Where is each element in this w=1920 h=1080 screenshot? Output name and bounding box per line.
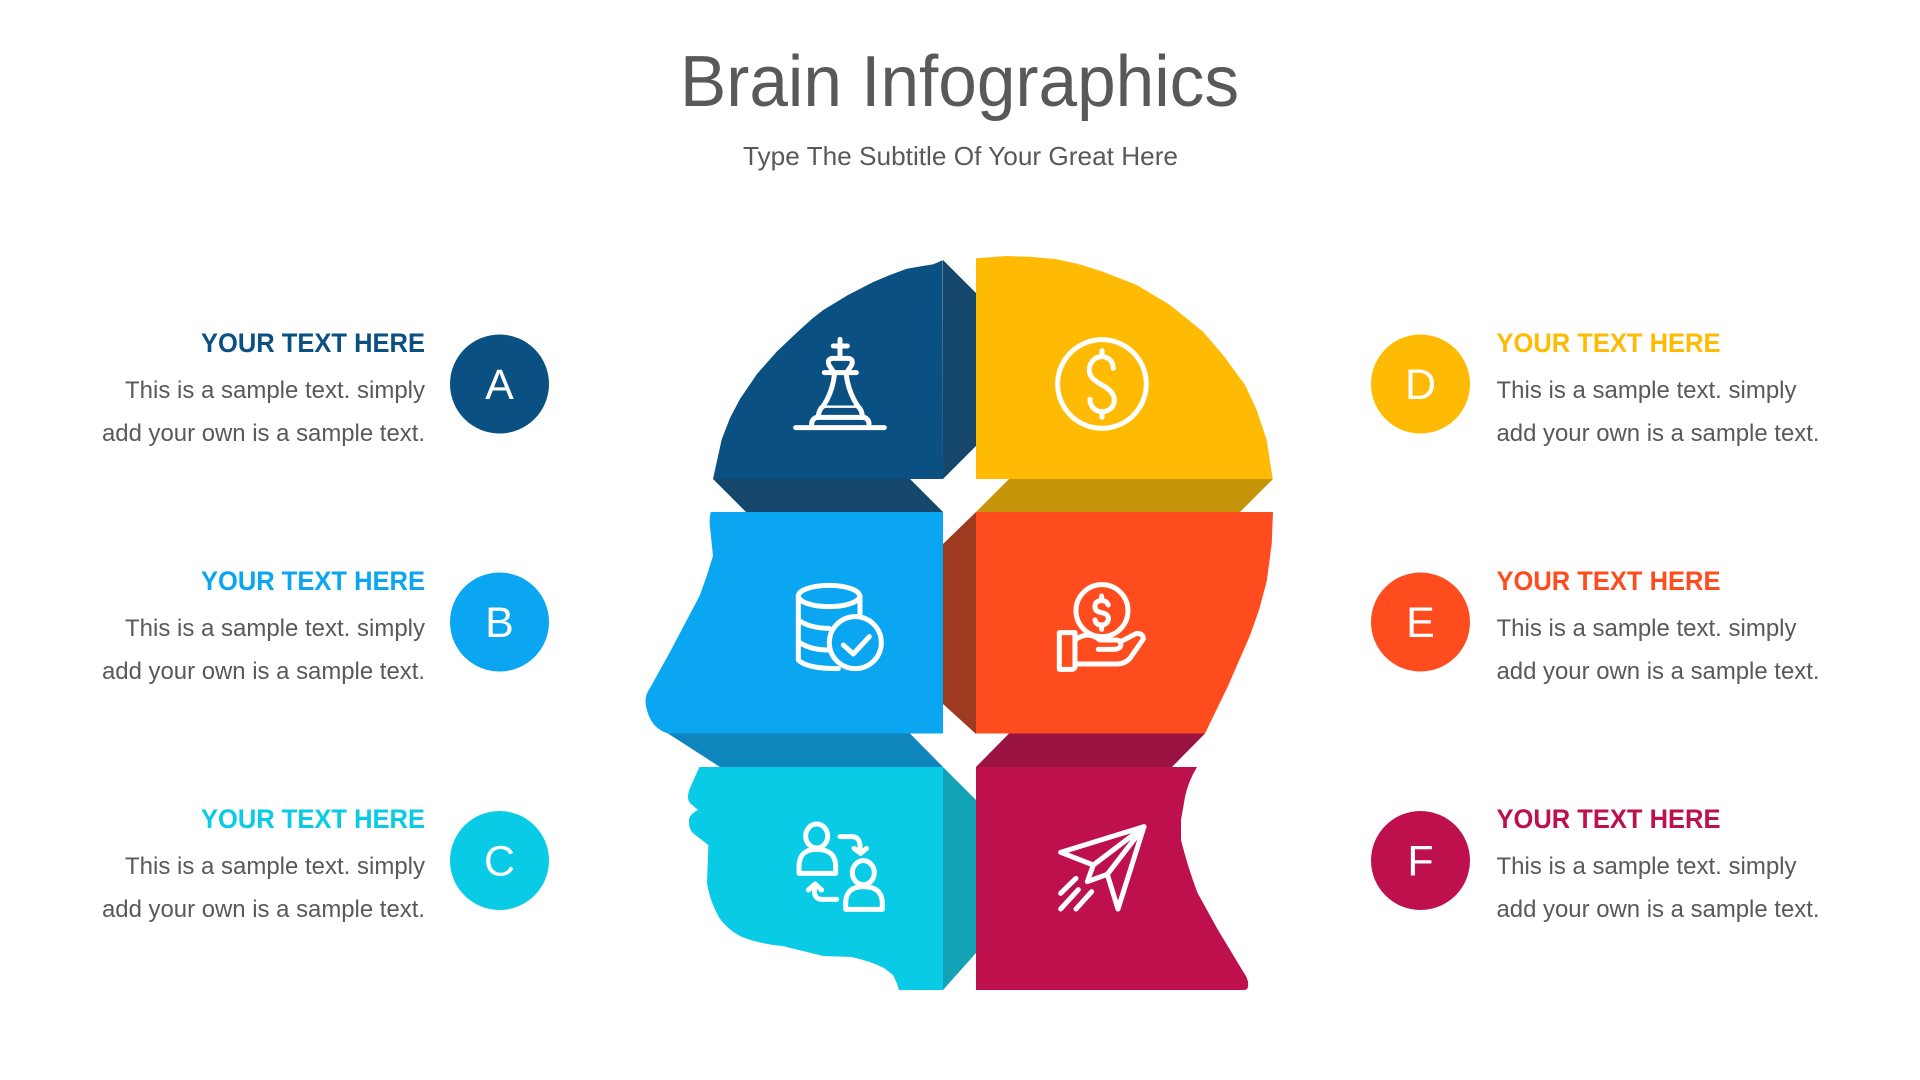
badge C: C	[484, 838, 515, 886]
subtitle: Type The Subtitle Of Your Great Here	[743, 141, 1178, 171]
badge A	[450, 334, 549, 434]
icon: dollar coin	[1058, 340, 1146, 428]
badge E	[1371, 572, 1470, 672]
panel: item E text	[1496, 566, 1820, 685]
panel: item B text: This is a sample text. simply	[125, 615, 425, 642]
badge D: D	[1405, 361, 1436, 409]
title: Brain Infographics	[680, 42, 1239, 122]
shadow: navy bottom	[713, 479, 943, 512]
shadow: navy right side	[943, 260, 976, 479]
panel: item C text	[102, 804, 425, 923]
panel: item B text	[102, 566, 425, 685]
badge E: E	[1406, 599, 1435, 647]
icon: paper plane	[1061, 827, 1144, 909]
badge F	[1371, 811, 1470, 910]
badge B	[450, 572, 549, 672]
segment E: orange back of head	[976, 512, 1273, 734]
panel: item A text: This is a sample text. simply	[125, 377, 425, 404]
shadow: cyan right side	[943, 767, 976, 990]
brain head diagram	[646, 256, 1273, 990]
segment B: blue face with nose	[646, 512, 943, 734]
panel: item A text: YOUR TEXT HERE	[201, 328, 425, 358]
icon: people exchange	[799, 824, 882, 909]
segment C: cyan chin and lips	[688, 767, 943, 990]
panel: item B text: YOUR TEXT HERE	[201, 566, 425, 596]
segment F: magenta neck	[976, 767, 1248, 990]
panel: item C text: YOUR TEXT HERE	[201, 804, 425, 834]
panel: item C text: add your own is a sample text.	[102, 896, 425, 923]
icon: database with check	[798, 585, 881, 669]
panel: item A text	[102, 328, 425, 447]
shadow: orange left side	[943, 512, 976, 734]
badge A: A	[485, 361, 514, 409]
panel: item F text: This is a sample text. simply	[1496, 853, 1796, 880]
shadow: blue bottom	[668, 734, 943, 767]
segment A: navy crown	[713, 260, 943, 479]
badge B: B	[485, 599, 514, 647]
panel: item F text	[1496, 804, 1820, 923]
badge C	[450, 811, 549, 910]
shadow: yellow bottom	[976, 479, 1273, 512]
icon: hand holding coin	[1059, 585, 1143, 669]
panel: item B text: add your own is a sample text.	[102, 658, 425, 685]
badge D	[1371, 334, 1470, 434]
icon: chess king	[796, 339, 884, 428]
panel: item F text: add your own is a sample text.	[1496, 896, 1820, 923]
segment D: yellow crown	[976, 256, 1273, 479]
shadow: orange bottom	[976, 734, 1205, 767]
panel: item E text: YOUR TEXT HERE	[1496, 566, 1720, 596]
badge F: F	[1407, 838, 1434, 886]
panel: item E text: This is a sample text. simply	[1496, 615, 1796, 642]
panel: item D text: This is a sample text. simply	[1496, 377, 1796, 404]
panel: item F text: YOUR TEXT HERE	[1496, 804, 1720, 834]
panel: item D text: add your own is a sample text.	[1496, 420, 1820, 447]
panel: item D text	[1496, 328, 1820, 447]
panel: item E text: add your own is a sample text.	[1496, 658, 1820, 685]
panel: item A text: add your own is a sample text.	[102, 420, 425, 447]
panel: item C text: This is a sample text. simply	[125, 853, 425, 880]
panel: item D text: YOUR TEXT HERE	[1496, 328, 1720, 358]
